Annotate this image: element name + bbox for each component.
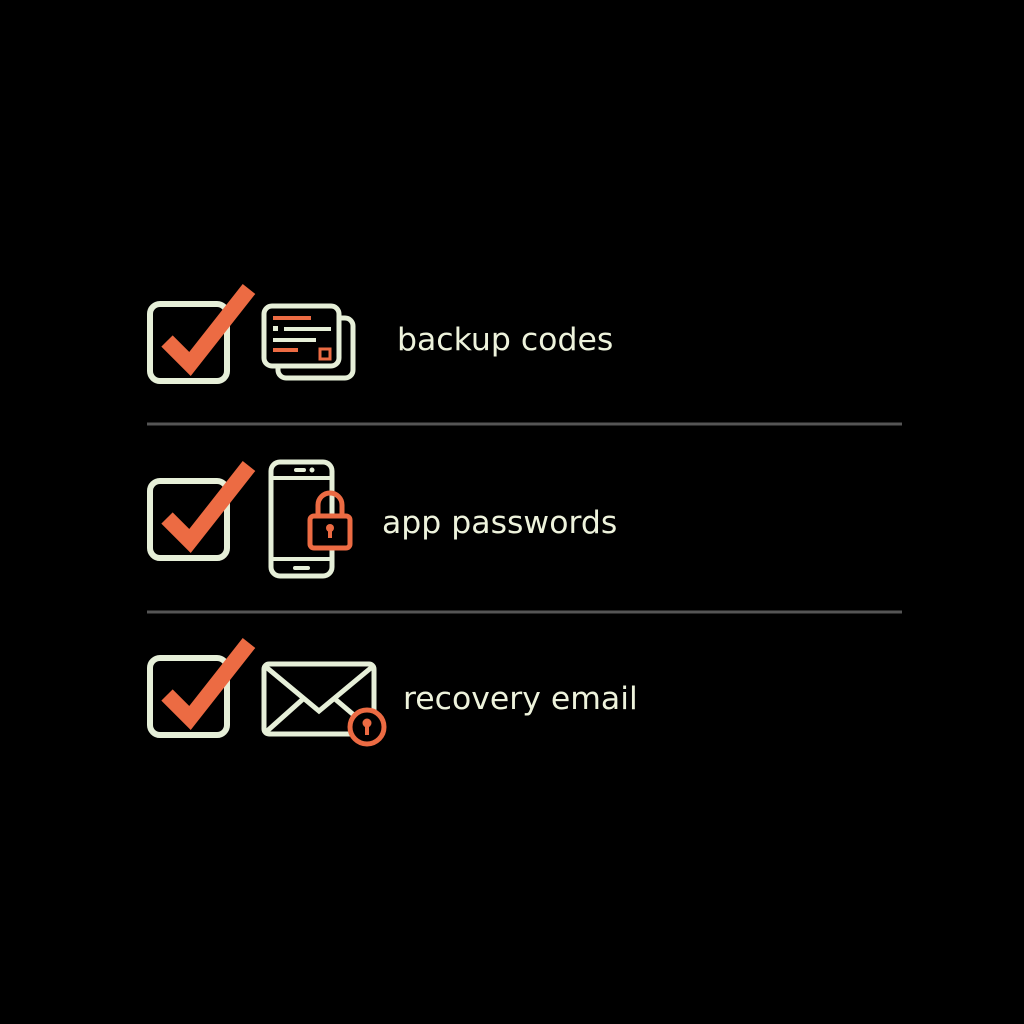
icon: envelope with lock: [264, 664, 384, 744]
row 1: backup codes: [150, 289, 353, 381]
icon: backup code cards: [264, 306, 353, 378]
label: app passwords: app passwords: [382, 505, 617, 541]
icon: checkbox 1: [150, 289, 249, 381]
icon: checkbox 3: [150, 643, 249, 735]
icon: checkbox 2: [150, 466, 249, 558]
icon: phone with lock: [271, 462, 350, 576]
label: backup codes: backup codes: [397, 322, 613, 358]
row 3: recovery email: [150, 643, 384, 744]
label: recovery email: recovery email: [403, 681, 638, 717]
row 2: app passwords: [150, 462, 350, 576]
